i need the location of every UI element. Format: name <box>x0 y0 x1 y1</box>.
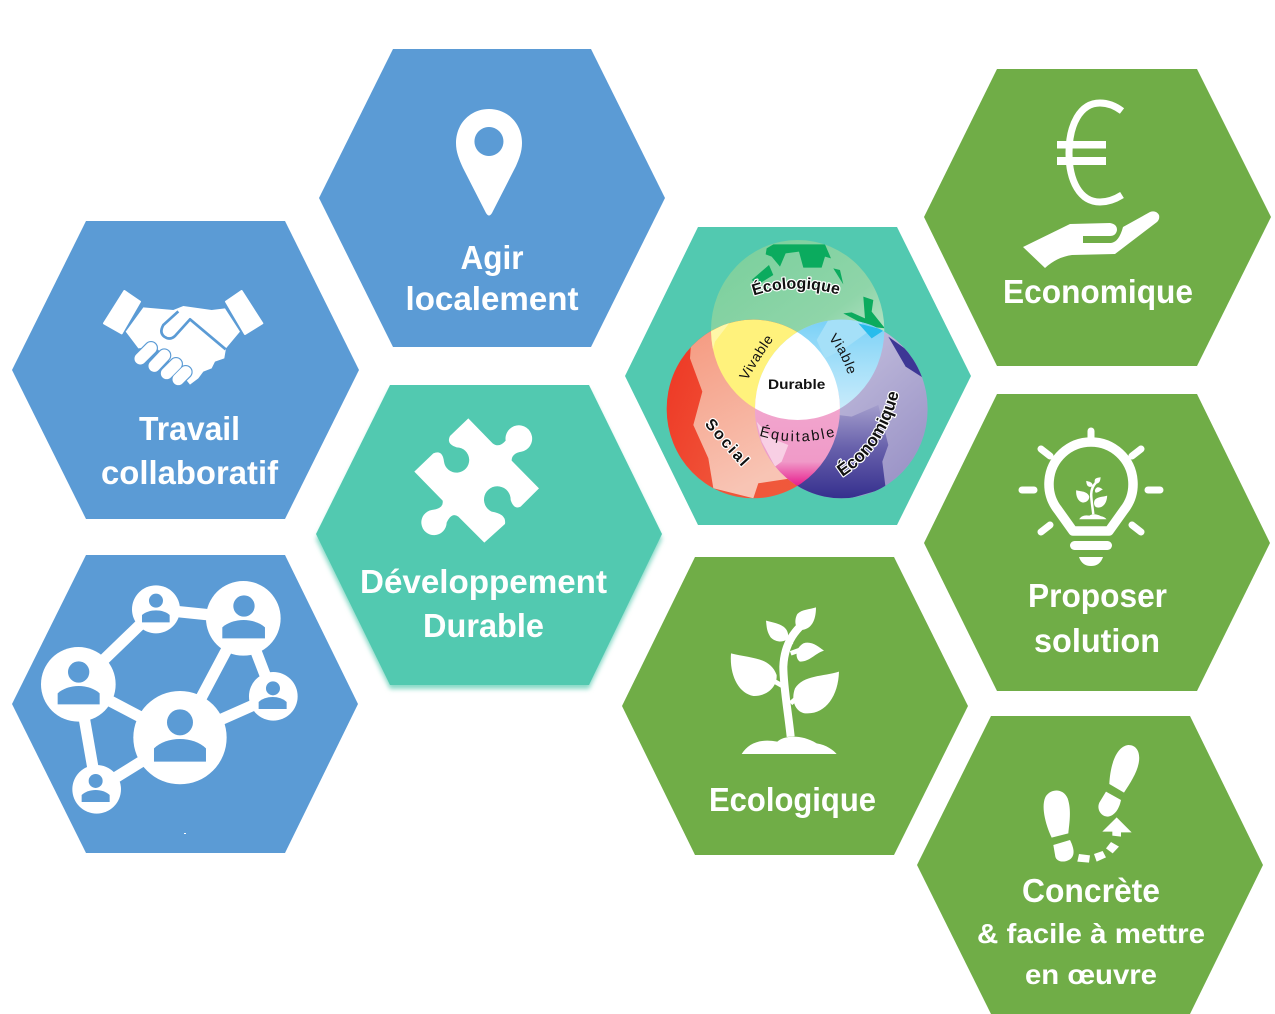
icon: euro over hand <box>1023 103 1159 268</box>
heading: proposer solution: Proposer <box>1028 577 1167 614</box>
panel: proposer solution <box>924 394 1270 691</box>
heading: développement durable: Durable <box>423 607 544 644</box>
label: écologique: Écologique <box>750 276 840 296</box>
text: facile à mettre en œuvre: & facile à mettre <box>977 918 1205 949</box>
icon: plant <box>731 607 839 754</box>
region: vivable <box>711 320 798 408</box>
panel: agir localement <box>319 49 665 347</box>
icon: puzzle piece <box>414 418 539 543</box>
label: équitable: Équitable <box>760 424 834 443</box>
panel: network <box>12 555 358 853</box>
label: viable: Viable <box>830 332 854 374</box>
label: durable: Durable <box>768 377 826 392</box>
panel: concrète <box>917 716 1263 1014</box>
panel: développement durable <box>316 385 662 689</box>
heading: proposer solution: solution <box>1034 622 1160 659</box>
icon: footsteps <box>1044 745 1139 863</box>
icon: light bulb with plant <box>1022 431 1160 566</box>
heading: travail collaboratif: Travail <box>139 410 240 447</box>
heading: economique: Economique <box>1003 273 1193 310</box>
text: facile à mettre en œuvre: en œuvre <box>1025 959 1157 990</box>
icon: handshake <box>104 291 262 385</box>
heading: agir localement: localement <box>406 280 579 317</box>
region: viable <box>758 320 884 408</box>
label: social: Social <box>704 418 751 468</box>
label: économique: Économique <box>835 390 900 478</box>
panel: venn diagram hexagon <box>625 227 971 525</box>
region: durable <box>755 332 840 420</box>
label: vivable: Vivable <box>738 336 772 378</box>
region: équitable <box>755 392 840 486</box>
heading: agir localement: Agir <box>460 239 524 276</box>
panel: economique <box>924 69 1271 366</box>
chart: sustainability venn diagram <box>666 240 928 498</box>
panel: travail collaboratif <box>12 221 359 519</box>
heading: développement durable: Développement <box>360 563 607 600</box>
heading: travail collaboratif: collaboratif <box>101 454 279 491</box>
heading: concrète: Concrète <box>1022 872 1160 909</box>
icon: map pin <box>456 109 522 216</box>
heading: ecologique: Ecologique <box>709 781 876 818</box>
icon: people network <box>41 581 298 814</box>
panel: ecologique <box>622 557 968 855</box>
